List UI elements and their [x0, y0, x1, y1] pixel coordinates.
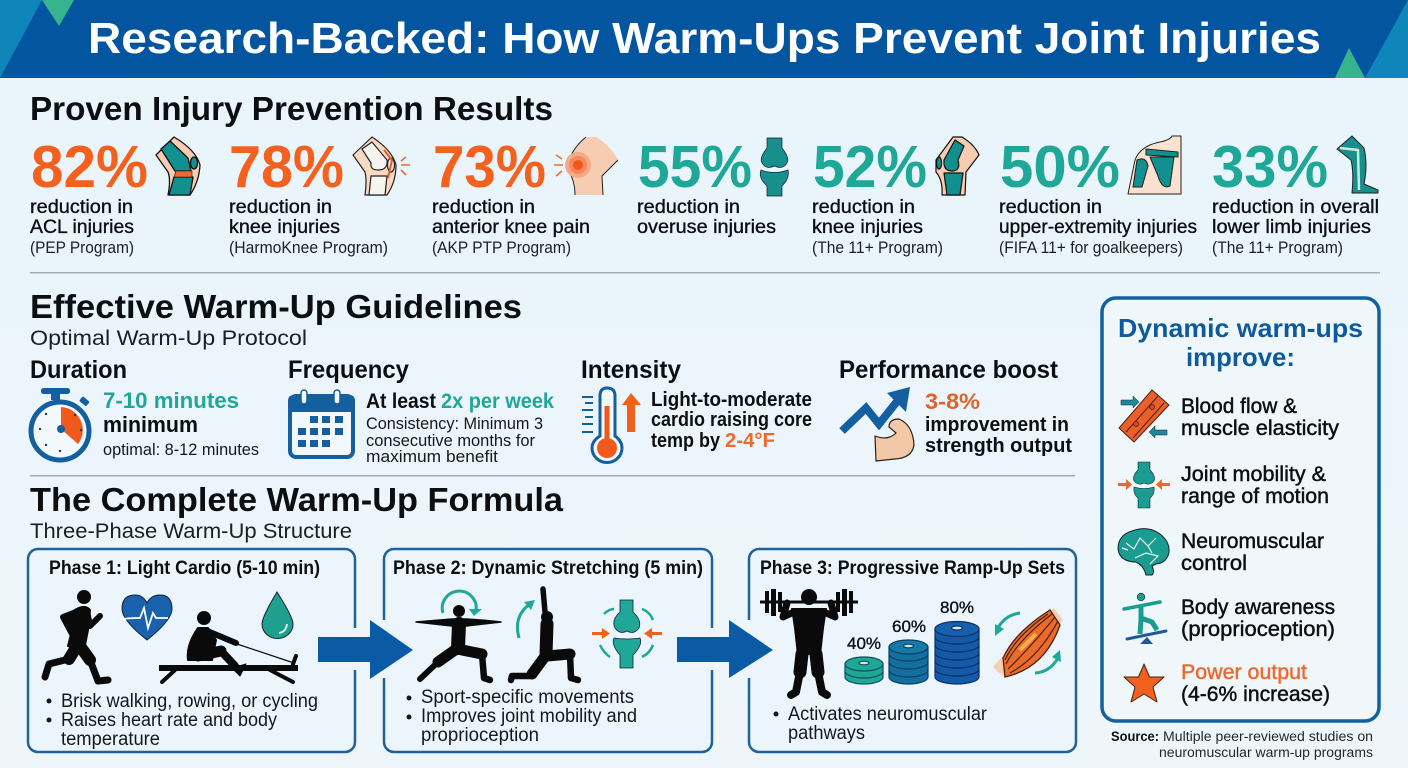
guideline: performance boost: 3-8%: [925, 389, 980, 414]
guideline: frequency: Frequency: [288, 356, 409, 384]
bullet list: [774, 704, 988, 744]
arrow: phase 1 to 2: [318, 620, 413, 679]
stat: 33% lower limb: lower limb injuries: [1212, 216, 1371, 238]
bullet list: Sport-specific movements: [421, 687, 634, 708]
guideline: duration: Duration: [30, 356, 127, 384]
source note: Multiple peer-reviewed studies on: [1163, 729, 1373, 744]
guideline: frequency: At least: [366, 390, 436, 413]
stat: 33% lower limb: 33%: [1212, 134, 1328, 200]
stat: 50% upper-extremity: reduction in: [999, 196, 1102, 218]
stat: 50% upper-extremity: 50%: [1000, 134, 1120, 200]
item: joint mobility: range of motion: [1181, 485, 1329, 508]
icon: calendar: [288, 390, 355, 457]
panel: phase 1: [28, 549, 355, 752]
guideline: intensity: [581, 356, 812, 462]
icon: rotation arrow: [442, 591, 482, 616]
guideline: frequency: maximum benefit: [366, 447, 498, 466]
panel: phase 2: [384, 549, 712, 752]
item: body awareness: (proprioception): [1181, 618, 1335, 641]
stat: 73% anterior knee pain: [432, 134, 618, 257]
panel: dynamic warm-ups improve: [1102, 298, 1379, 721]
guideline: frequency: consecutive months for: [366, 431, 535, 450]
icon: plates 80: [935, 622, 979, 684]
icon: ACL knee: [156, 137, 200, 195]
stat: 73% anterior knee pain: 73%: [433, 134, 546, 200]
stat: 78% knee: (HarmoKnee Program): [229, 239, 388, 257]
guideline: performance boost: [839, 356, 1072, 461]
stat: 50% upper-extremity: (FIFA 11+ for goalkeepers): [999, 239, 1183, 257]
guideline: intensity: temp by: [651, 430, 721, 452]
icon: muscle arrows: [995, 613, 1061, 673]
stat: 82% ACL: ACL injuries: [30, 216, 134, 238]
stat: 55% overuse: overuse injuries: [637, 216, 776, 238]
panel title: Dynamic warm-ups: [1118, 313, 1363, 343]
arrow: phase 2 to 3: [677, 620, 773, 678]
heading: formula: The Complete Warm-Up Formula: [30, 481, 564, 518]
bullet list: temperature: [61, 729, 160, 750]
icon: muscle: [993, 608, 1063, 678]
bullet list: Brisk walking, rowing, or cycling: [61, 691, 318, 712]
icon: weightlifter: [760, 589, 858, 695]
bullet list: pathways: [788, 723, 865, 744]
stat: 78% knee: 78%: [229, 134, 344, 200]
stat: 78% knee: knee injuries: [229, 216, 340, 238]
guideline: intensity: 2-4°F: [725, 430, 775, 452]
guideline: performance boost: strength output: [925, 435, 1072, 457]
panel: phase 1: Phase 1: Light Cardio (5-10 min): [49, 558, 320, 579]
bullet list: Raises heart rate and body: [61, 710, 277, 731]
guideline: performance boost: improvement in: [925, 414, 1069, 436]
item: power output: [1124, 661, 1330, 706]
icon: joint with arrows: [592, 600, 662, 668]
stat: 73% anterior knee pain: reduction in: [432, 196, 535, 218]
bullet list: proprioception: [421, 725, 539, 746]
icon: rower: [159, 611, 298, 682]
stat: 55% overuse: 55%: [638, 134, 752, 200]
icon: lunge pose: [511, 589, 578, 680]
divider: [30, 272, 1380, 274]
title: Research-Backed: How Warm-Ups Prevent Joint Injuries: [88, 14, 1321, 63]
guideline: intensity: Light-to-moderate: [651, 389, 812, 411]
icon: plates 60: [889, 640, 928, 684]
stat: 73% anterior knee pain: (AKP PTP Program): [432, 239, 571, 257]
header banner: [0, 0, 1408, 78]
icon: heart rate: [120, 595, 172, 640]
stat: 55% overuse: [637, 134, 788, 238]
guideline: duration: minimum: [103, 412, 198, 437]
item: neuromuscular control: [1118, 529, 1324, 575]
item: power output: (4-6% increase): [1181, 683, 1330, 706]
guideline: intensity: cardio raising core: [651, 409, 812, 431]
bullet list: [406, 687, 637, 746]
icon: teal knee: [936, 137, 979, 195]
stat: 52% knee 11+: [812, 134, 979, 257]
panel title: improve:: [1186, 342, 1295, 372]
stat: 50% upper-extremity: upper-extremity injuries: [999, 216, 1197, 238]
guideline: frequency: Consistency: Minimum 3: [366, 414, 543, 433]
stat: 33% lower limb: [1212, 134, 1379, 257]
stat: 33% lower limb: (The 11+ Program): [1212, 239, 1343, 257]
stat: 78% knee: reduction in: [229, 196, 332, 218]
icon: stopwatch: [31, 388, 90, 460]
item: body awareness: [1124, 593, 1335, 644]
divider: [30, 475, 1075, 476]
guideline: performance boost: Performance boost: [839, 356, 1059, 384]
item: joint mobility: Joint mobility &: [1181, 463, 1326, 486]
bullet list: [46, 691, 318, 750]
label: percentages: 80%: [940, 598, 974, 617]
guideline: frequency: [288, 356, 554, 466]
stat: 52% knee 11+: knee injuries: [812, 216, 923, 238]
item: neuromuscular control: Neuromuscular: [1181, 530, 1324, 553]
stat: 82% ACL: [30, 134, 200, 257]
icon: runner: [45, 590, 108, 681]
icon: joint: [760, 138, 788, 196]
bullet list: Improves joint mobility and: [421, 706, 637, 727]
heading: guidelines: Effective Warm-Up Guidelines: [30, 288, 522, 325]
stat: 82% ACL: 82%: [31, 134, 148, 200]
stat: 50% upper-extremity: [999, 134, 1197, 257]
stat: 52% knee 11+: 52%: [813, 134, 927, 200]
guideline: duration: optimal: 8-12 minutes: [103, 440, 259, 459]
icon: shoulder: [1128, 136, 1181, 194]
stat: 78% knee: [229, 134, 410, 257]
guideline: duration: [30, 356, 259, 460]
icon: thermometer: [582, 388, 641, 462]
guideline: frequency: 2x per week: [441, 390, 554, 413]
panel: phase 2: Phase 2: Dynamic Stretching (5 min): [393, 558, 703, 579]
label: percentages: 60%: [892, 617, 926, 636]
icon: water drop: [262, 592, 293, 638]
item: blood flow: Blood flow &: [1181, 395, 1297, 418]
source note: [1111, 729, 1373, 760]
icon: plates 40: [845, 657, 883, 684]
subheading: protocol: Optimal Warm-Up Protocol: [30, 327, 307, 350]
panel: phase 3: Phase 3: Progressive Ramp-Up Sets: [760, 558, 1065, 579]
item: blood flow: [1119, 390, 1340, 442]
stat: 33% lower limb: reduction in overall: [1212, 196, 1379, 218]
stat: 52% knee 11+: reduction in: [812, 196, 915, 218]
guideline: intensity: Intensity: [581, 356, 681, 384]
source note: neuromuscular warm-up programs: [1159, 745, 1373, 760]
item: blood flow: muscle elasticity: [1181, 417, 1340, 440]
icon: upward arrow: [517, 600, 535, 638]
stat: 52% knee 11+: (The 11+ Program): [812, 239, 943, 257]
label: percentages: 40%: [847, 634, 881, 653]
icon: leg: [1337, 136, 1378, 193]
item: joint mobility: [1118, 462, 1329, 508]
guideline: duration: 7-10 minutes: [103, 388, 239, 413]
item: neuromuscular control: control: [1181, 552, 1247, 575]
panel: phase 3: [749, 549, 1076, 752]
bullet list: Activates neuromuscular: [788, 704, 988, 725]
heading: proven results: Proven Injury Prevention Results: [30, 90, 553, 127]
item: body awareness: Body awareness: [1181, 596, 1335, 619]
stat: 82% ACL: reduction in: [30, 196, 133, 218]
icon: warrior pose: [416, 605, 501, 680]
subheading: structure: Three-Phase Warm-Up Structure: [30, 520, 352, 543]
stat: 73% anterior knee pain: anterior knee pain: [432, 216, 590, 238]
icon: trend arrow and bicep: [842, 387, 914, 461]
stat: 55% overuse: reduction in: [637, 196, 740, 218]
panel title: [1118, 313, 1363, 372]
source note: Source:: [1111, 729, 1159, 744]
label: percentages: [847, 598, 974, 653]
stat: 82% ACL: (PEP Program): [30, 239, 134, 257]
icon: knee pain spot: [554, 137, 618, 195]
icon: injured knee: [353, 137, 410, 195]
item: power output: Power output: [1181, 661, 1307, 684]
